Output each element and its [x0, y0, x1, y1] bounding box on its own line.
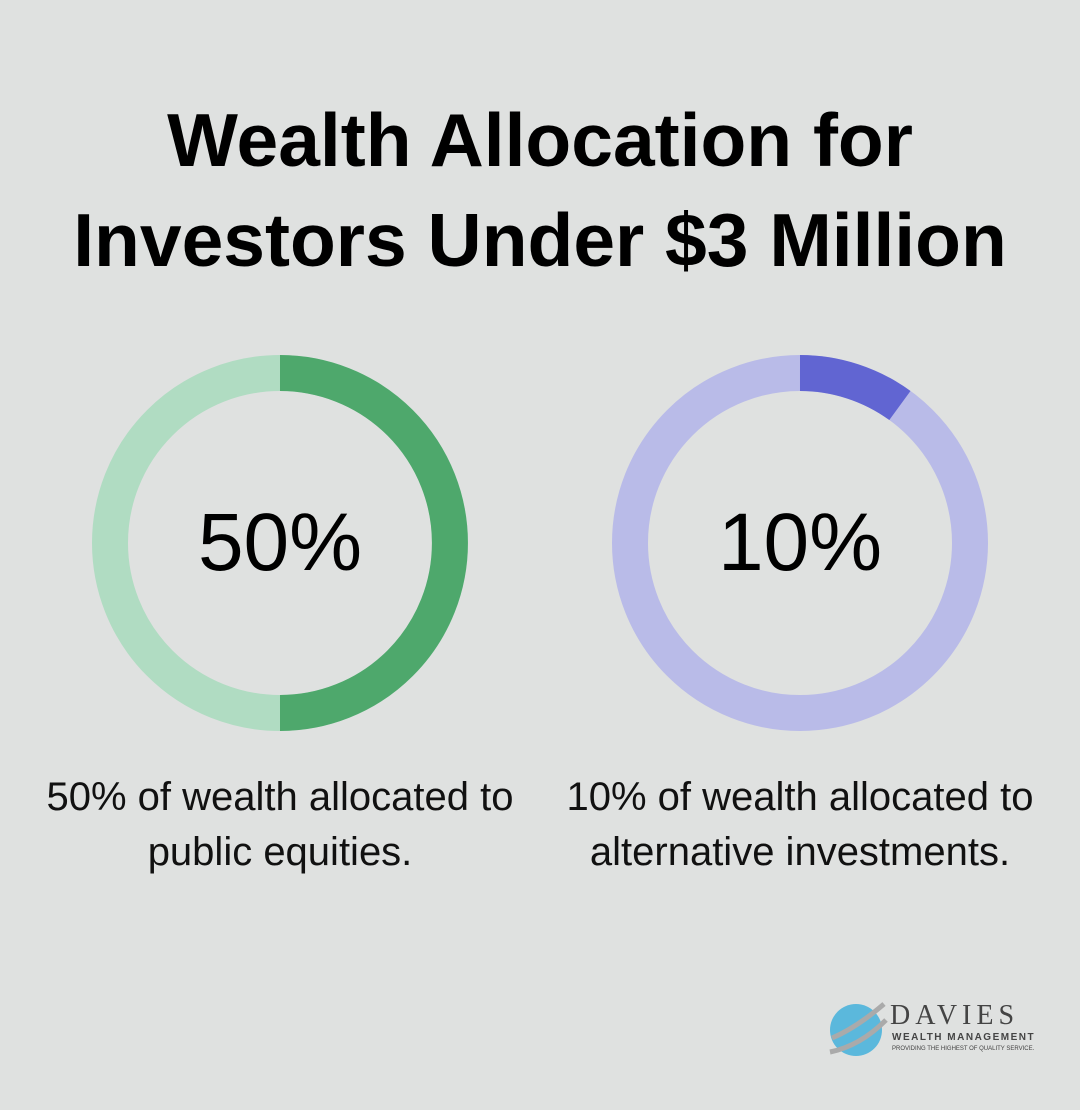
logo [830, 1000, 1035, 1056]
logo: WEALTH MANAGEMENT [892, 1032, 1035, 1043]
logo text: DAVIES [890, 1000, 1019, 1031]
icon: globe [830, 1002, 888, 1056]
chart: donut 10%: 10% [718, 497, 882, 588]
caption: public equities: 50% of wealth allocated to [46, 775, 513, 819]
caption: public equities: public equities. [148, 830, 412, 874]
title: Investors Under $3 Million [73, 198, 1007, 282]
chart: donut 50%: 50% [198, 497, 362, 588]
caption: public equities [46, 775, 513, 874]
logo: PROVIDING THE HIGHEST OF QUALITY SERVICE. [892, 1046, 1034, 1052]
title [73, 98, 1007, 282]
caption: alternative investments [566, 775, 1033, 874]
title: Wealth Allocation for [167, 98, 913, 182]
chart: donut 50% [92, 355, 468, 731]
chart: donut 10% [612, 355, 988, 731]
caption: alternative investments: alternative investments. [590, 830, 1010, 874]
caption: alternative investments: 10% of wealth allocated to [566, 775, 1033, 819]
